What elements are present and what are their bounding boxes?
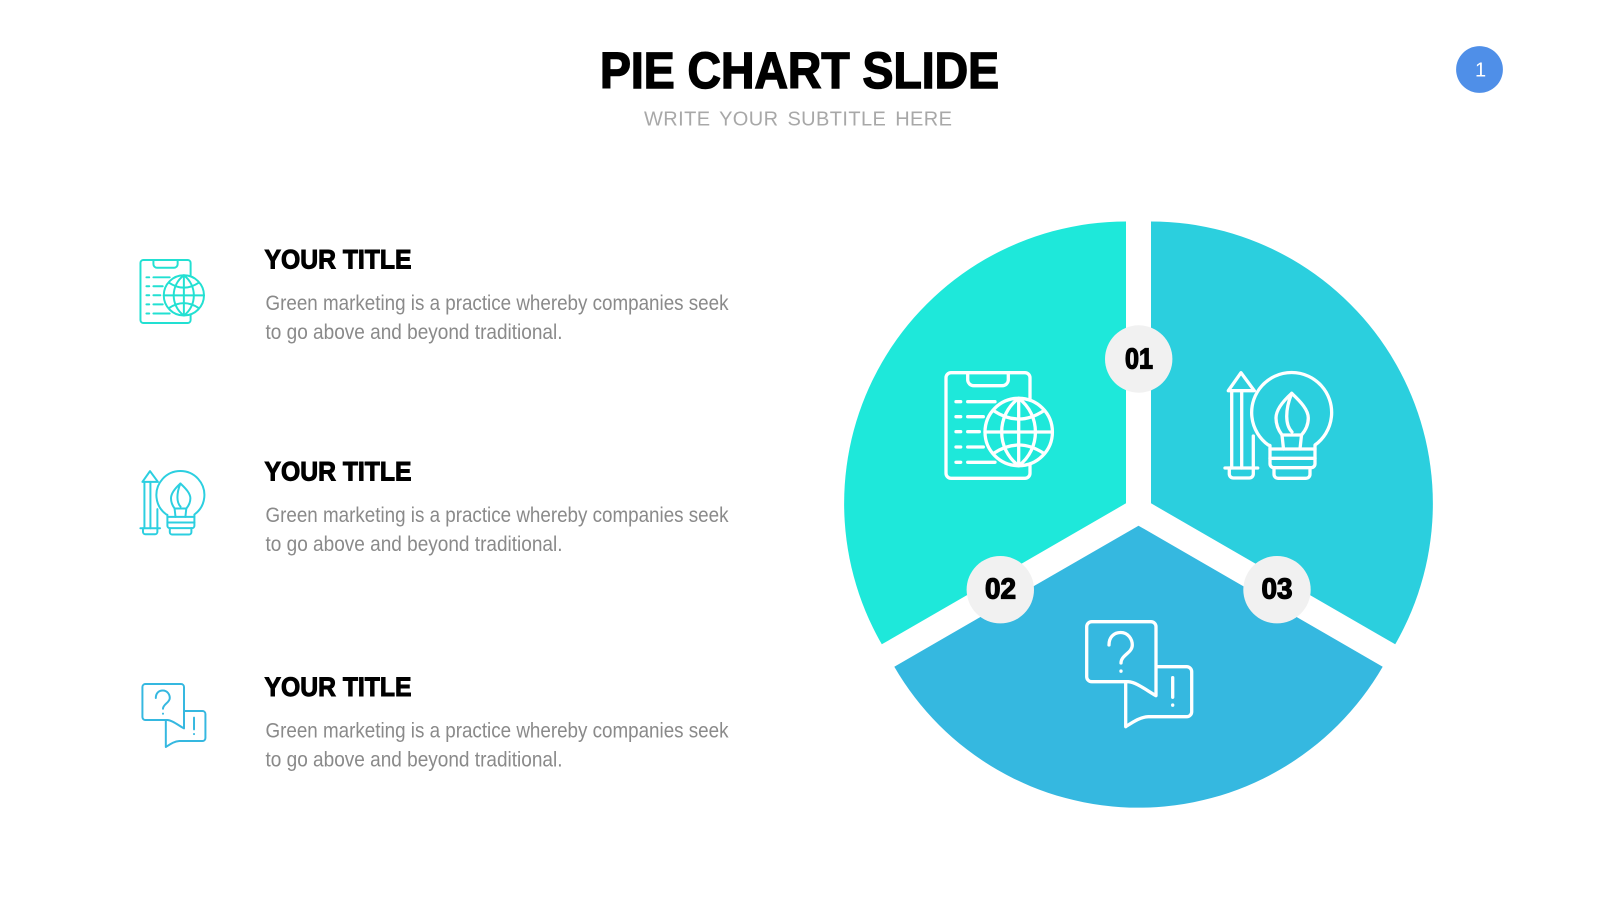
list item 2: to go above and beyond traditional. — [266, 532, 562, 556]
icon: light bulb and pencil — [140, 471, 204, 534]
number badge 03 — [1243, 556, 1311, 623]
list item 1 — [140, 244, 729, 344]
number badge 03: 03 — [1262, 574, 1292, 606]
segment 01 — [844, 222, 1126, 644]
icon: speech bubbles — [142, 684, 205, 747]
list item 2 — [140, 456, 729, 556]
text block: Green marketing is a practice whereby companies seek — [266, 718, 729, 742]
icon: clipboard with globe — [946, 373, 1052, 478]
number badge 02: 02 — [985, 574, 1016, 606]
number badge 01: 01 — [1125, 344, 1153, 376]
icon: speech bubbles — [1087, 622, 1192, 727]
text block: Green marketing is a practice whereby companies seek — [266, 503, 729, 527]
title: PIE CHART SLIDE — [600, 42, 999, 99]
text block: Green marketing is a practice whereby companies seek — [266, 291, 729, 315]
icon: light bulb and pencil — [1225, 373, 1332, 478]
number badge 01 — [1105, 325, 1172, 393]
pie chart — [844, 222, 1433, 808]
segment 03 — [894, 526, 1383, 808]
heading: YOUR TITLE — [264, 456, 412, 486]
number badge 02 — [967, 556, 1034, 623]
list item 3 — [142, 672, 729, 772]
segment 02 — [1151, 222, 1433, 644]
list item 1: to go above and beyond traditional. — [266, 320, 562, 344]
heading: YOUR TITLE — [264, 244, 412, 274]
icon: clipboard with globe — [140, 260, 204, 323]
heading: YOUR TITLE — [264, 672, 412, 702]
subtitle: WRITE YOUR SUBTITLE HERE — [644, 108, 952, 130]
page number badge — [1456, 46, 1503, 93]
list item 3: to go above and beyond traditional. — [266, 748, 562, 772]
page number badge: 1 — [1475, 60, 1486, 82]
